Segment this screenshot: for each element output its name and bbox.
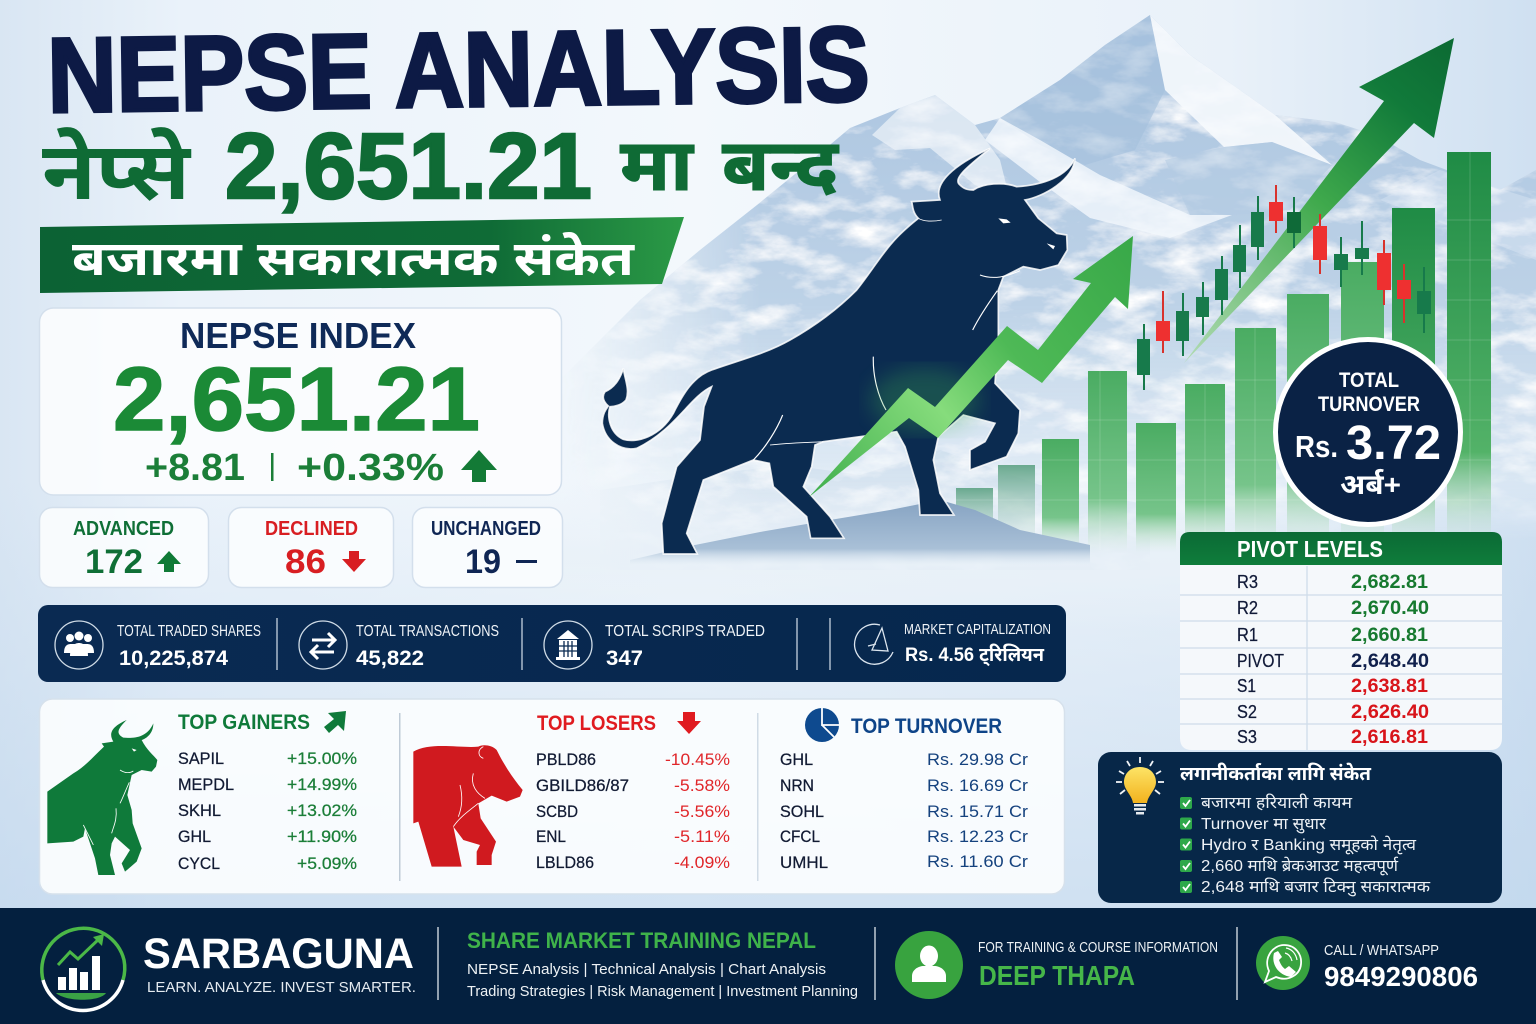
icon: person — [895, 931, 963, 999]
panel: movers — [40, 699, 1064, 894]
market stats strip: MARKET CAPITALIZATION — [904, 621, 1051, 638]
panel: pivot levels — [1180, 532, 1502, 750]
top gainers: +5.09% — [297, 854, 357, 873]
rocky ledge under bull — [630, 500, 1090, 565]
panel: investor signals: Hydro र Banking समूहको नेतृत्व — [1201, 835, 1417, 855]
top gainers: +14.99% — [287, 775, 357, 794]
top losers: -5.11% — [674, 827, 730, 846]
top turnover — [780, 708, 1028, 872]
icon: check marks — [1180, 797, 1192, 893]
footer: DEEP THAPA — [979, 960, 1135, 991]
panel: pivot levels: S1 — [1237, 676, 1256, 696]
subtitle — [42, 114, 840, 218]
top losers: SCBD — [536, 802, 578, 821]
panel: pivot levels: S3 — [1237, 727, 1257, 747]
footer: Trading Strategies | Risk Management | Investment Planning — [467, 983, 858, 1000]
panel: investor signals: लगानीकर्ताका लागि संकेत — [1180, 762, 1372, 785]
panel: NEPSE index: NEPSE INDEX — [180, 315, 416, 356]
top gainers: MEPDL — [178, 775, 234, 794]
market stats strip: 45,822 — [356, 647, 424, 670]
top turnover: TOP TURNOVER — [851, 715, 1002, 738]
top losers: -5.58% — [674, 776, 730, 795]
mist — [540, 480, 1200, 630]
market stats strip: TOTAL TRADED SHARES — [117, 623, 261, 640]
top losers — [536, 712, 730, 872]
top turnover: Rs. 16.69 Cr — [927, 776, 1028, 795]
top gainers: SKHL — [178, 801, 221, 820]
callout: total turnover — [1276, 340, 1460, 524]
panel: pivot levels: R1 — [1237, 625, 1258, 645]
market stats strip: 347 — [606, 647, 643, 670]
top gainers: +11.90% — [287, 827, 357, 846]
top turnover: Rs. 29.98 Cr — [927, 750, 1028, 769]
panel: pivot levels: PIVOT — [1237, 651, 1284, 671]
footer: LEARN. ANALYZE. INVEST SMARTER. — [147, 979, 416, 996]
callout: total turnover: TOTAL — [1339, 369, 1399, 392]
top gainers: +13.02% — [287, 801, 357, 820]
panel: pivot levels: 2,638.81 — [1351, 676, 1428, 697]
stat: declined: 86 — [285, 543, 326, 581]
subtitle: नेप्से — [42, 126, 192, 216]
top losers: -4.09% — [674, 853, 730, 872]
stat: declined: DECLINED — [265, 518, 358, 540]
top turnover: Rs. 12.23 Cr — [927, 827, 1028, 846]
icon: red bear — [413, 745, 523, 867]
panel: pivot levels: 2,648.40 — [1351, 651, 1429, 672]
stat: declined — [228, 508, 394, 588]
small green arrow — [809, 236, 1133, 497]
subtitle: मा — [620, 126, 695, 206]
big green arrow — [1184, 38, 1454, 363]
top turnover: GHL — [780, 750, 813, 769]
top turnover: NRN — [780, 776, 814, 795]
panel: NEPSE index — [40, 308, 562, 495]
stat: advanced: 172 — [85, 543, 143, 581]
top losers: PBLD86 — [536, 750, 596, 769]
callout: total turnover: अर्ब+ — [1340, 468, 1401, 500]
banner — [40, 217, 684, 293]
top gainers: TOP GAINERS — [178, 711, 310, 734]
panel: pivot levels: R2 — [1237, 598, 1258, 618]
icon: Sarbaguna logo — [42, 928, 125, 1010]
panel: pivot levels: 2,670.40 — [1351, 598, 1429, 619]
market stats strip: TOTAL SCRIPS TRADED — [605, 623, 765, 640]
title: NEPSE ANALYSIS — [47, 6, 870, 135]
callout: total turnover: TURNOVER — [1318, 393, 1420, 416]
panel: investor signals: Turnover मा सुधार — [1201, 816, 1326, 834]
top turnover: UMHL — [780, 853, 828, 872]
top losers: ENL — [536, 827, 566, 846]
panel: investor signals: 2,660 माथि ब्रेकआउट महत्वपूर्ण — [1201, 856, 1399, 876]
panel: pivot levels: 2,616.81 — [1351, 727, 1428, 748]
callout: total turnover: 3.72 — [1346, 417, 1441, 470]
icon: capitalization gauge — [855, 624, 893, 664]
icon: people — [55, 621, 103, 669]
footer: 9849290806 — [1324, 961, 1478, 992]
top gainers: +15.00% — [287, 749, 357, 768]
market stats strip: 10,225,874 — [119, 647, 228, 670]
top gainers: CYCL — [178, 854, 220, 873]
top losers: LBLD86 — [536, 853, 594, 872]
icon: building — [544, 621, 592, 669]
top losers: -10.45% — [665, 750, 730, 769]
subtitle: बन्द — [722, 126, 840, 206]
panel: investor signals: 2,648 माथि बजार टिक्नु सकारात्मक — [1201, 878, 1431, 897]
icon: green bull — [47, 720, 157, 875]
stat: advanced: ADVANCED — [73, 518, 174, 540]
icon: WhatsApp — [1256, 936, 1310, 990]
panel: pivot levels: 2,660.81 — [1351, 625, 1428, 646]
top gainers — [178, 711, 357, 873]
top losers: -5.56% — [674, 802, 730, 821]
stat: advanced — [40, 508, 208, 588]
bull silhouette — [602, 148, 1075, 554]
panel: NEPSE index: 2,651.21 — [113, 350, 480, 450]
market stats strip: TOTAL TRANSACTIONS — [356, 623, 499, 640]
arrow glow on bull — [870, 368, 980, 432]
bar chart — [956, 152, 1491, 553]
icon: exchange arrows — [299, 621, 347, 669]
candlestick chart — [1137, 185, 1431, 390]
footer: NEPSE Analysis | Technical Analysis | Chart Analysis — [467, 961, 826, 978]
top turnover: SOHL — [780, 802, 824, 821]
panel: pivot levels: PIVOT LEVELS — [1237, 536, 1383, 562]
icon: up arrow — [461, 450, 497, 482]
footer: CALL / WHATSAPP — [1324, 943, 1439, 959]
stat: unchanged — [412, 508, 562, 588]
top turnover: Rs. 11.60 Cr — [927, 852, 1028, 871]
top turnover: CFCL — [780, 827, 820, 846]
stat: unchanged: 19 — [465, 543, 501, 581]
bull details — [998, 218, 1011, 223]
top gainers: GHL — [178, 827, 211, 846]
market stats strip: Rs. 4.56 ट्रिलियन — [905, 644, 1044, 666]
panel: investor signals — [1098, 752, 1502, 903]
icon: light bulb — [1116, 757, 1164, 814]
footer: FOR TRAINING & COURSE INFORMATION — [978, 940, 1218, 956]
stat: unchanged: UNCHANGED — [431, 518, 541, 540]
callout: total turnover: Rs. — [1295, 429, 1338, 464]
panel: investor signals: बजारमा हरियाली कायम — [1201, 794, 1352, 812]
panel: NEPSE index: +0.33% — [297, 447, 444, 489]
banner: बजारमा सकारात्मक संकेत — [72, 231, 635, 286]
panel: pivot levels: R3 — [1237, 572, 1258, 592]
top turnover: Rs. 15.71 Cr — [927, 802, 1028, 821]
top losers: GBILD86/87 — [536, 776, 629, 795]
footer: SHARE MARKET TRAINING NEPAL — [467, 928, 816, 953]
panel: pivot levels: 2,626.40 — [1351, 702, 1429, 723]
market stats strip — [38, 605, 1066, 682]
top gainers: SAPIL — [178, 749, 224, 768]
subtitle: 2,651.21 — [225, 114, 592, 218]
panel: NEPSE index: +8.81 — [145, 447, 245, 489]
footer — [0, 908, 1536, 1024]
icon: pie chart — [805, 708, 839, 742]
panel: pivot levels: S2 — [1237, 702, 1257, 722]
top losers: TOP LOSERS — [537, 712, 656, 735]
panel: pivot levels: 2,682.81 — [1351, 572, 1428, 593]
footer: SARBAGUNA — [143, 930, 414, 978]
mountain range — [598, 15, 1536, 530]
